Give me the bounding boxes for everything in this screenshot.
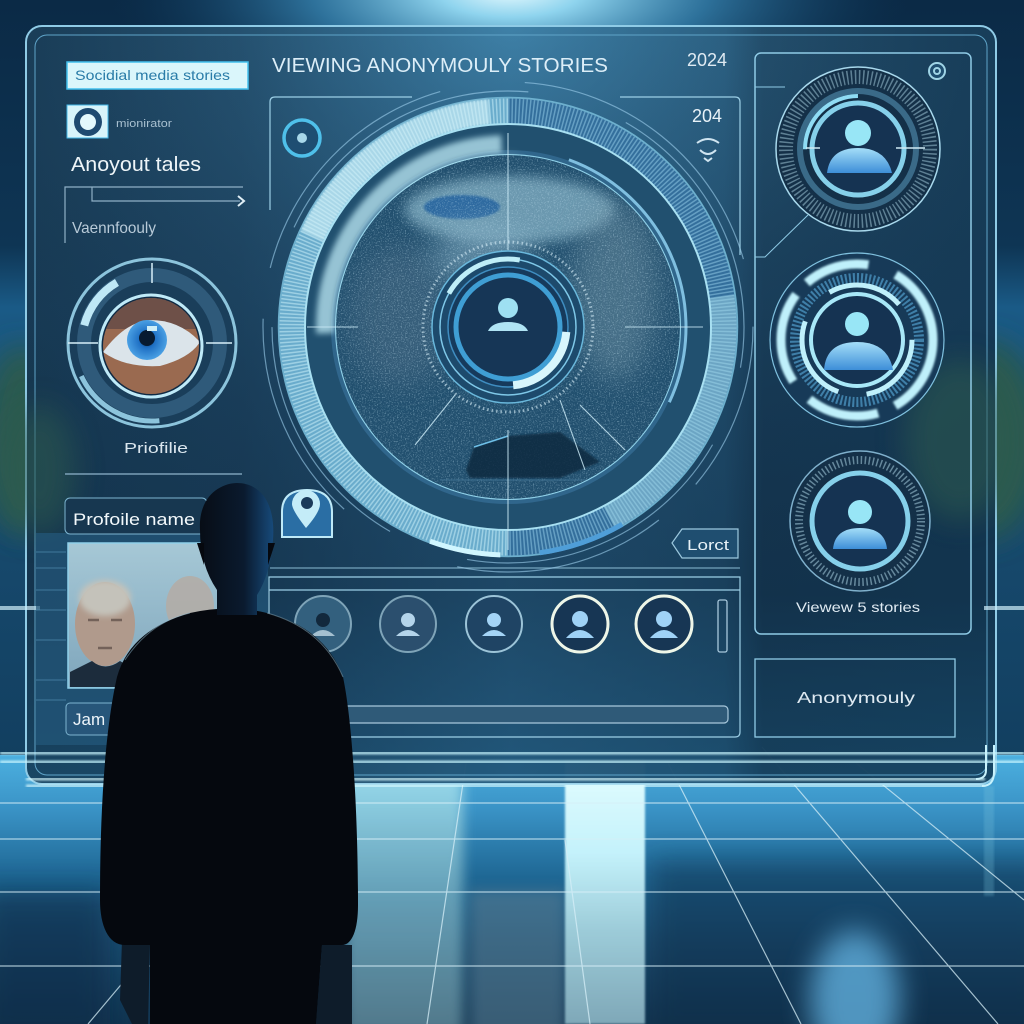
icon: small badge xyxy=(929,63,945,79)
ears xyxy=(197,543,275,565)
location pin button xyxy=(282,490,332,537)
left column: monitor row: mionirator xyxy=(116,118,172,130)
left column: heading: Anoyout tales xyxy=(71,154,201,176)
avatar dial 3 xyxy=(790,451,930,591)
progress bar xyxy=(340,706,728,723)
avatar 2 xyxy=(380,596,436,652)
button: lorct: Lorct xyxy=(687,537,730,554)
crosshair xyxy=(307,133,703,550)
shoulder rim light xyxy=(125,613,343,677)
profile photo xyxy=(68,543,218,688)
outer thin arcs xyxy=(186,5,830,649)
anonymously box: Anonymouly xyxy=(797,690,915,707)
inner speckled globe xyxy=(336,155,680,499)
trees seen through the panel xyxy=(5,360,1015,535)
icon: wifi xyxy=(697,139,719,161)
hands xyxy=(120,940,352,1024)
central radar dial xyxy=(262,82,754,573)
avatar 5 xyxy=(636,596,692,652)
profile name box: Profoile name xyxy=(73,510,195,529)
center rings xyxy=(423,242,593,412)
profile name box xyxy=(65,498,207,534)
left column: arrow line xyxy=(65,187,244,243)
small year label: 204 xyxy=(692,106,722,126)
title: VIEWING ANONYMOULY STORIES xyxy=(272,55,608,77)
avatar row xyxy=(295,596,692,652)
silhouette of person xyxy=(100,483,358,1024)
neck and head xyxy=(200,483,273,615)
glowing floor edge lines xyxy=(0,745,1024,786)
torso and arms xyxy=(100,608,358,1024)
floor xyxy=(0,747,1024,1024)
eye widget xyxy=(66,257,238,429)
anonymously box xyxy=(755,659,955,737)
avatar 1 xyxy=(295,596,351,652)
scrollbar xyxy=(718,600,727,652)
year label: 2024 xyxy=(687,50,727,70)
button: lorct xyxy=(672,529,738,558)
name field xyxy=(66,703,126,735)
right column frame xyxy=(755,53,971,634)
main holographic panel xyxy=(0,26,1024,784)
left column: label: Vaennfoouly xyxy=(72,220,156,237)
name field: Jam xyxy=(73,710,105,729)
left column: monitor row xyxy=(67,105,172,138)
profile stripes background xyxy=(36,533,268,745)
left column: social media label xyxy=(67,62,248,89)
caption: viewed stories: Viewew 5 stories xyxy=(796,599,920,615)
icon: circular badge xyxy=(284,120,320,156)
avatar 4 xyxy=(552,596,608,652)
avatar 3 xyxy=(466,596,522,652)
left column: social media label: Socidial media stories xyxy=(75,67,230,83)
avatar dial 2 xyxy=(770,253,944,427)
trees behind the panel xyxy=(0,340,1024,540)
left column: profile caption: Priofilie xyxy=(124,440,188,457)
central panel frame xyxy=(269,97,740,737)
avatar dial 1 xyxy=(776,67,940,231)
